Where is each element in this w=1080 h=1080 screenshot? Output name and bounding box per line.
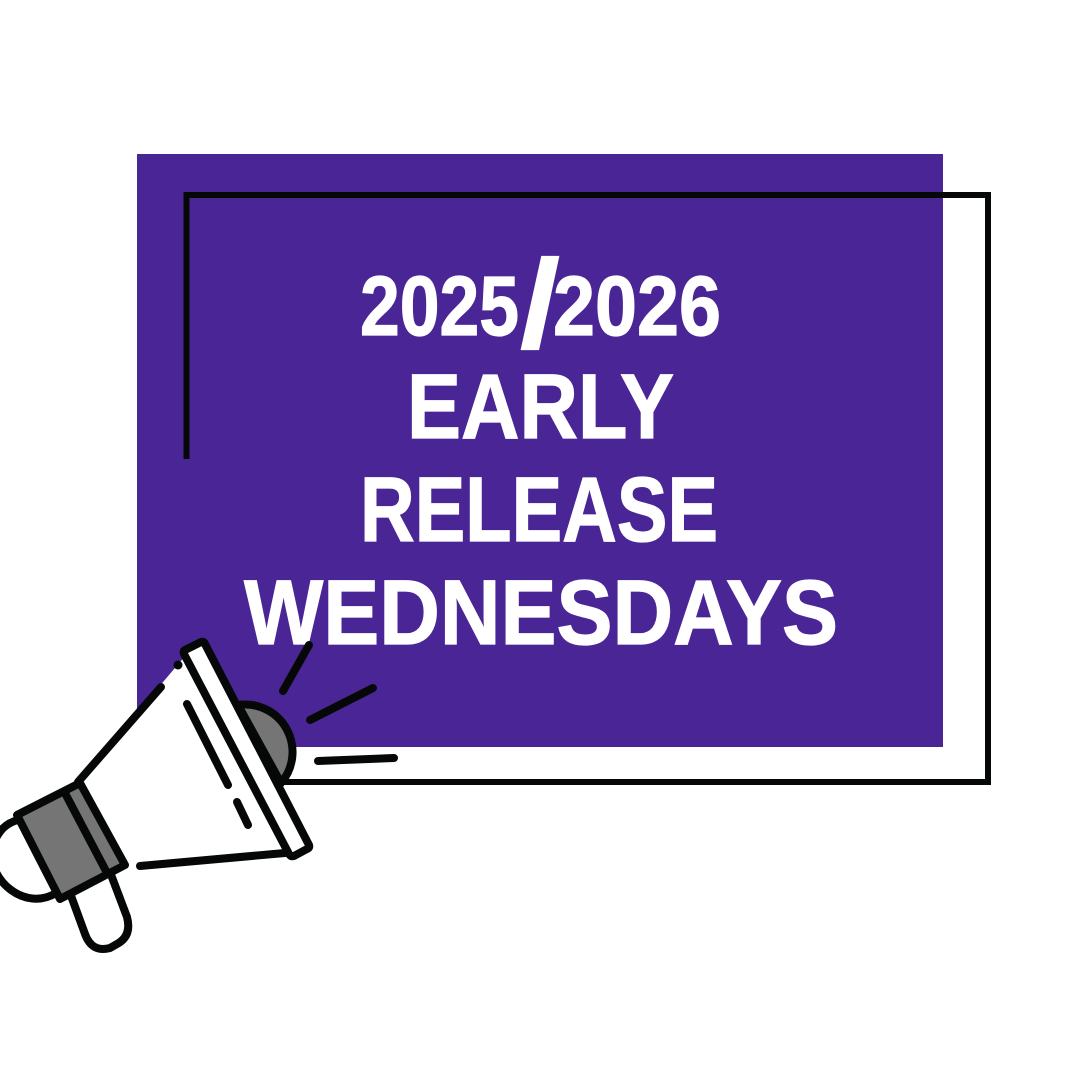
megaphone cone top edge: [78, 687, 161, 782]
megaphone handle: [70, 872, 128, 949]
megaphone back cap: [0, 820, 56, 899]
megaphone highlight short: [237, 802, 248, 825]
sound ray lower: [318, 758, 394, 761]
sound ray upper: [283, 645, 309, 691]
megaphone cone dot: [174, 660, 182, 670]
title: 2025: [360, 259, 519, 353]
panel: purple background: [137, 154, 943, 747]
megaphone dome: [238, 704, 293, 783]
megaphone rim: [184, 642, 309, 856]
megaphone highlight long: [187, 704, 228, 785]
megaphone cone bottom edge: [140, 853, 285, 866]
title: WEDNESDAYS: [244, 562, 838, 664]
title: RELEASE: [360, 459, 718, 561]
title: /: [520, 235, 560, 374]
megaphone cone: [78, 655, 292, 870]
icon: megaphone: [0, 642, 394, 949]
title: EARLY: [407, 356, 674, 458]
megaphone collar: [17, 783, 125, 899]
title: 2026: [553, 259, 721, 353]
sound ray middle: [310, 688, 373, 720]
title: [244, 235, 838, 664]
black outline frame: [186, 195, 988, 782]
megaphone collar divider: [66, 795, 106, 871]
